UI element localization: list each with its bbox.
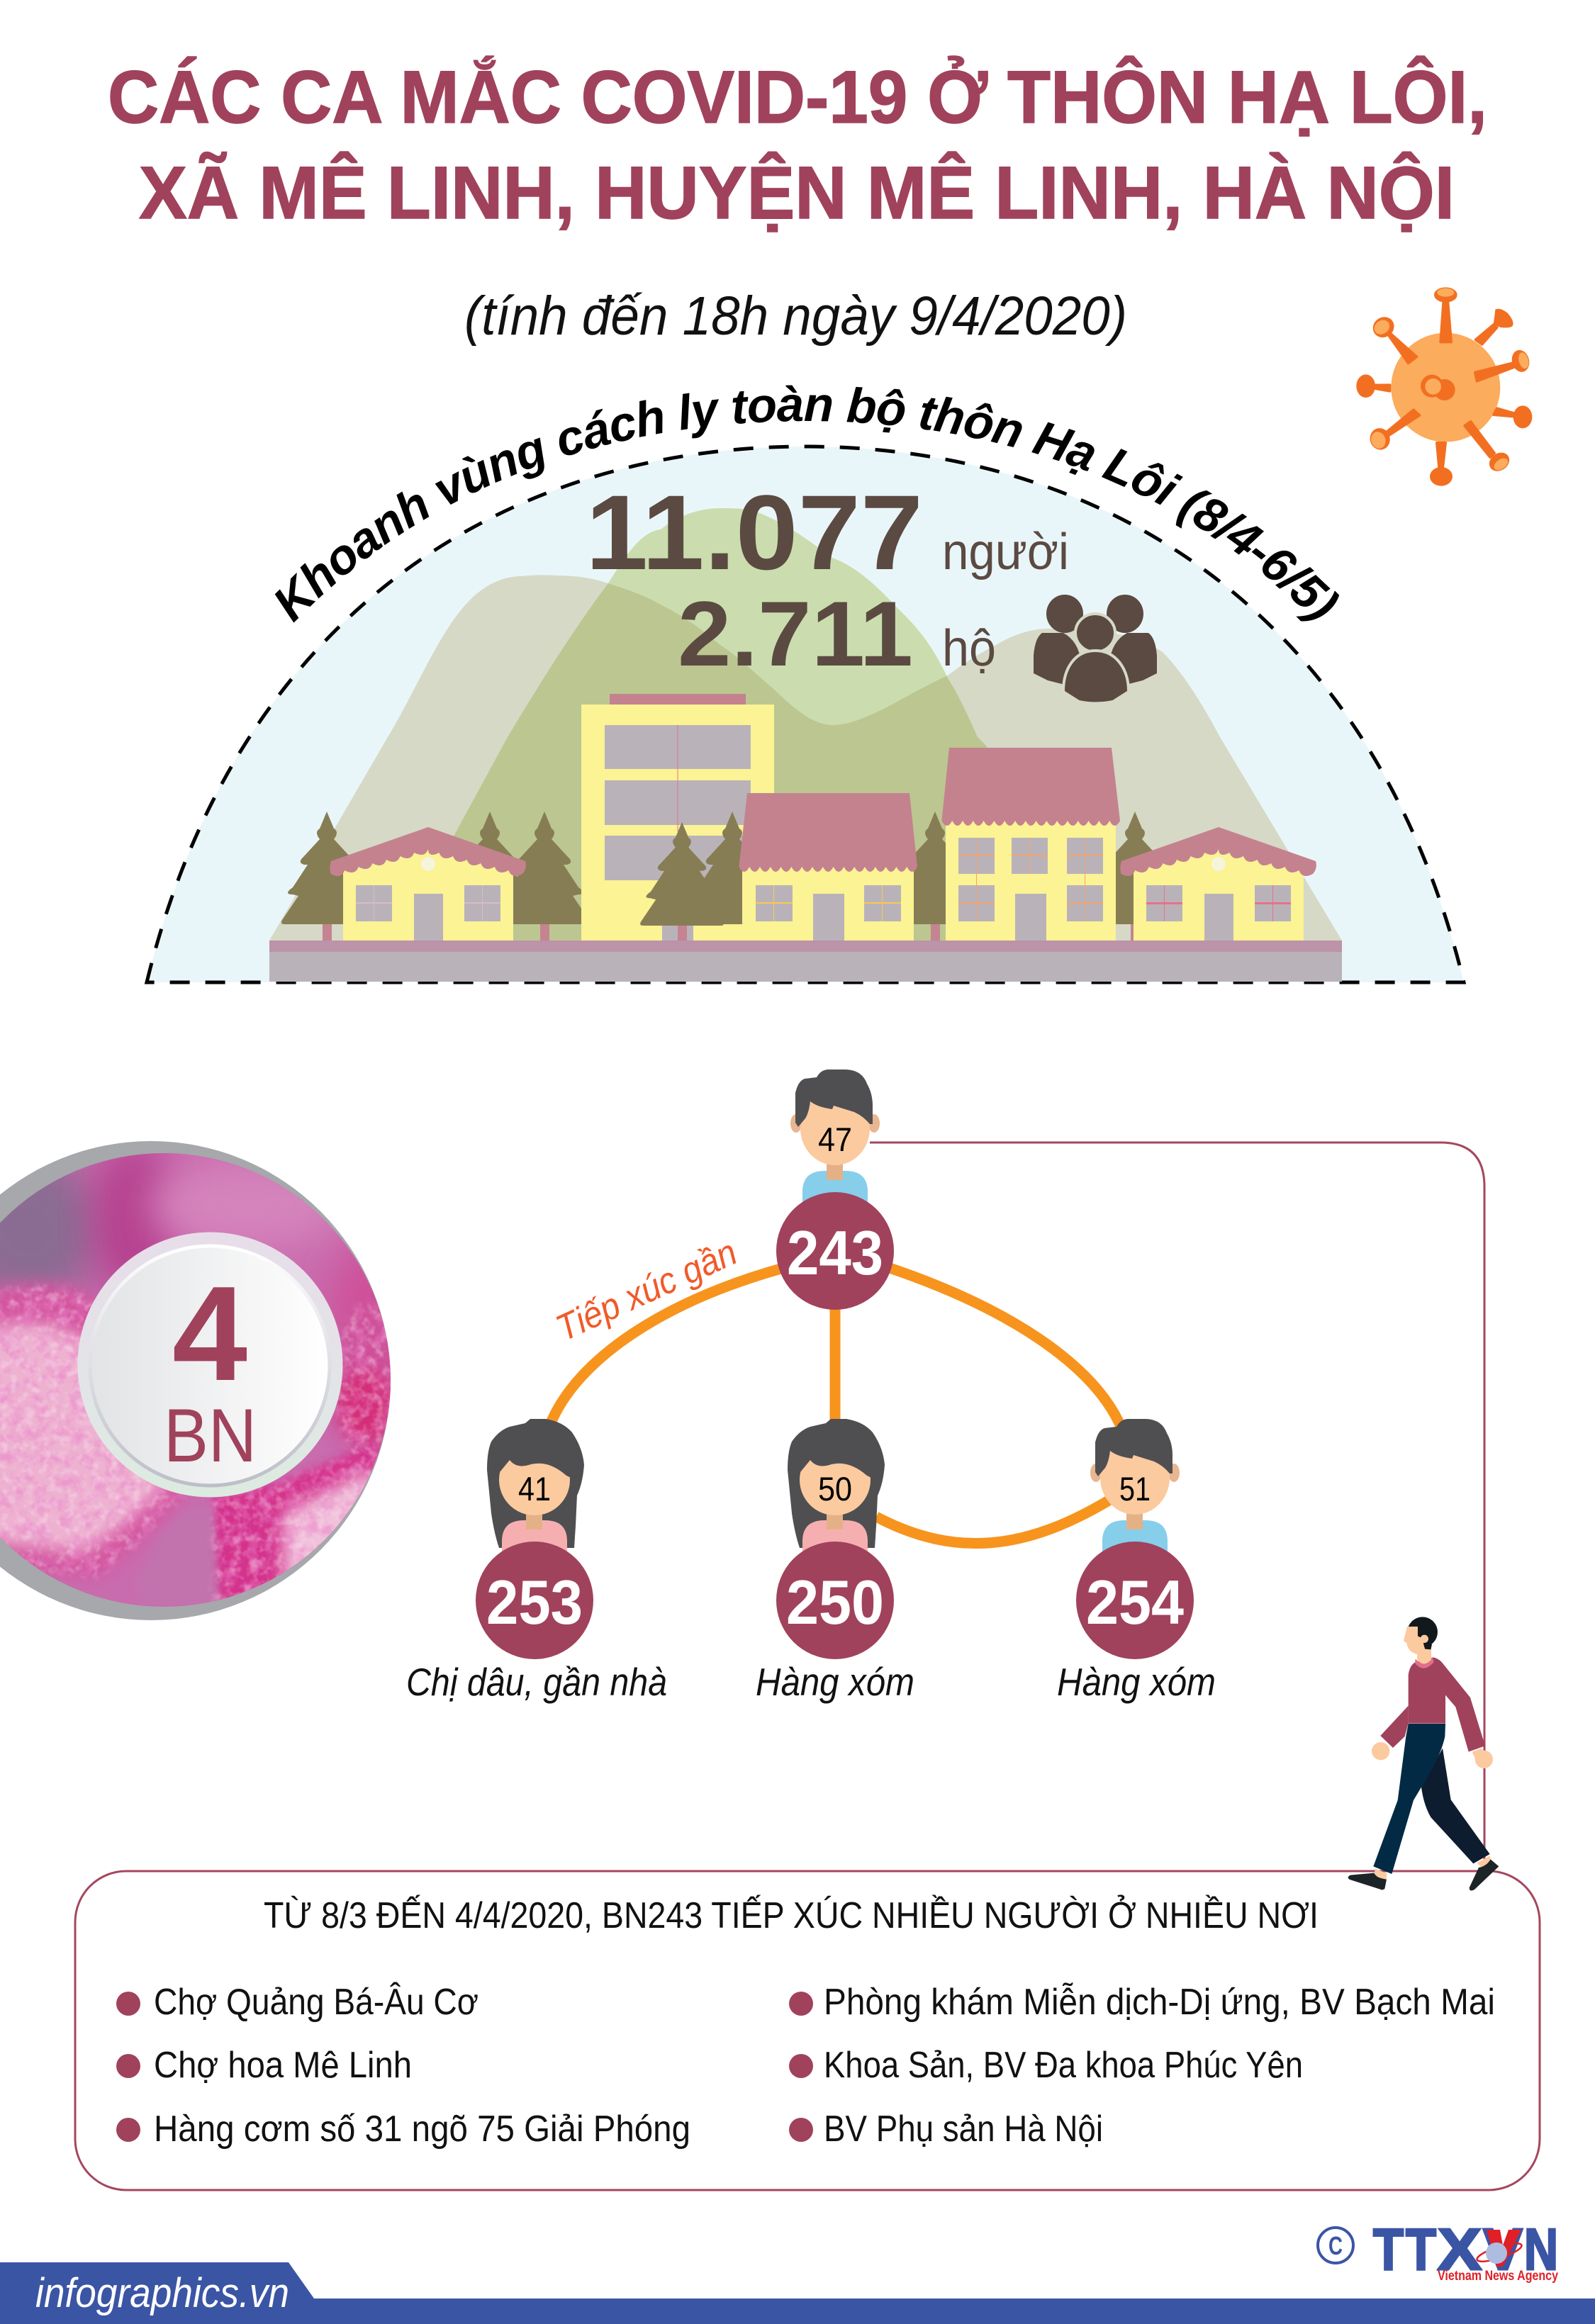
patient 253: 41 [518, 1470, 551, 1508]
icon: walking man [1348, 1617, 1499, 1890]
subtitle: date: (tính đến 18h ngày 9/4/2020) [464, 286, 1127, 347]
list: right column: BV Phụ sản Hà Nội [824, 2109, 1103, 2150]
tall building [581, 694, 774, 941]
label: close contact: Tiếp xúc gần [550, 1232, 743, 1349]
title: CÁC CA MẮC COVID-19 Ở THÔN HẠ LÔI, [108, 55, 1487, 139]
list: left column: Chợ hoa Mê Linh [154, 2045, 412, 2086]
population figure: people: người [942, 524, 1069, 580]
connector: line to walking man [870, 1143, 1484, 1871]
icon: group of people [1034, 595, 1157, 703]
list: right column: Phòng khám Miễn dịch-Dị ứng, BV Bạch Mai [824, 1982, 1495, 2023]
relation labels: Hàng xóm [756, 1660, 914, 1704]
footer bar [0, 2262, 1595, 2324]
title: XÃ MÊ LINH, HUYỆN MÊ LINH, HÀ NỘI [139, 151, 1455, 235]
house: tall right [941, 748, 1120, 941]
patient 254 [1076, 1419, 1194, 1659]
list: left column: Hàng cơm số 31 ngõ 75 Giải Phóng [154, 2109, 690, 2150]
logo: TTXVN: Vietnam News Agency [1438, 2269, 1558, 2284]
patient 243: 243 [787, 1218, 883, 1288]
logo: TTXVN [1318, 2216, 1558, 2284]
patient 250: 50 [818, 1470, 852, 1508]
arc heading: Khoanh vùng cách ly toàn bộ thôn Hạ Lôi (8/4-6/5) [275, 386, 1340, 623]
panel: places visited [75, 1871, 1540, 2190]
patient 243: 47 [818, 1121, 852, 1158]
badge: 4 BN [78, 1232, 343, 1497]
household figure: hộ [942, 620, 996, 677]
relation labels: Hàng xóm [1057, 1660, 1216, 1704]
patient 254: 254 [1086, 1567, 1184, 1637]
mountains [269, 508, 1342, 941]
badge: 4 BN: BN [164, 1393, 257, 1478]
road [269, 941, 1342, 982]
contact links [550, 1268, 1122, 1544]
house: right cottage [1120, 827, 1316, 941]
badge photo: virus micrograph [0, 1141, 391, 1620]
panel heading: TỪ 8/3 ĐẾN 4/4/2020, BN243 TIẾP XÚC NHIỀU NGƯỜI Ở NHIỀU NƠI [264, 1894, 1319, 1936]
relation labels [406, 1660, 1216, 1704]
population figure: people: 11.077 [586, 473, 923, 592]
logo: TTXVN: T [1373, 2216, 1404, 2282]
relation labels: Chị dâu, gần nhà [406, 1660, 667, 1704]
icon: virus [1356, 287, 1532, 486]
patient 253 [476, 1419, 593, 1659]
list: left column [116, 1982, 690, 2150]
logo: TTXVN: N [1524, 2216, 1558, 2282]
patient 243 [776, 1070, 894, 1310]
panel: quarantine dome [147, 447, 1464, 982]
house: middle [739, 793, 917, 941]
patient 250: 250 [786, 1567, 884, 1637]
list: right column [789, 1982, 1495, 2150]
patient 253: 253 [486, 1567, 583, 1637]
logo: TTXVN: C [1328, 2231, 1343, 2260]
front trees [640, 812, 778, 941]
logo: TTXVN: T [1406, 2216, 1436, 2282]
list: left column: Chợ Quảng Bá-Âu Cơ [154, 1982, 478, 2023]
list: right column: Khoa Sản, BV Đa khoa Phúc Yên [824, 2045, 1303, 2086]
house: left cottage [330, 827, 526, 941]
village: trees behind buildings [281, 812, 1180, 941]
title [108, 55, 1487, 235]
population figure: people [586, 473, 1069, 592]
badge: 4 BN: 4 [172, 1259, 247, 1409]
patient 250 [776, 1419, 894, 1659]
logo: TTXVN: V [1483, 2216, 1523, 2282]
footer: website: infographics.vn [35, 2270, 289, 2316]
household figure: 2.711 [678, 582, 913, 685]
patient 254: 51 [1119, 1470, 1151, 1508]
logo: TTXVN: X [1438, 2216, 1482, 2282]
